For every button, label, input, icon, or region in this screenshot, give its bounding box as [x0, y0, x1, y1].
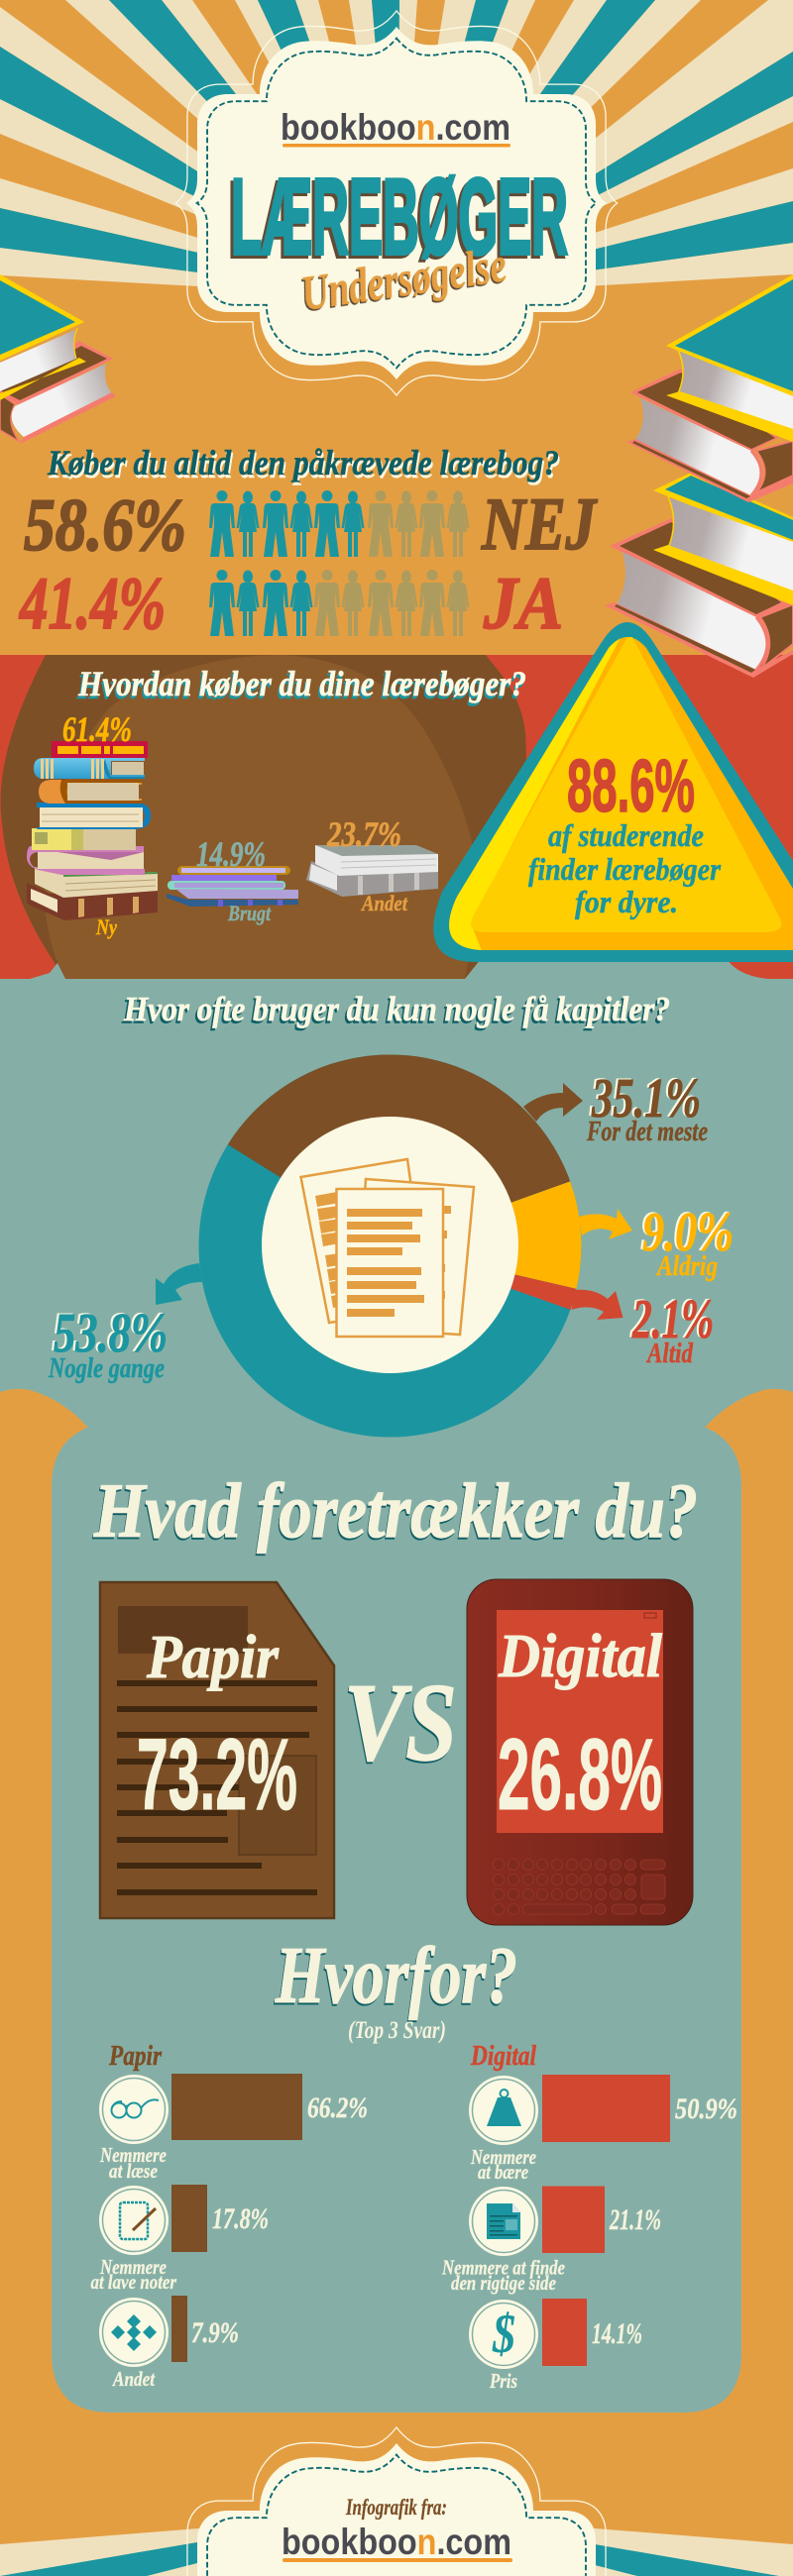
icon: diamonds	[111, 2314, 157, 2351]
heading: preference: Hvad foretrækker du?	[93, 1467, 698, 1554]
question: required textbook: Køber du altid den påkrævede lærebog?	[47, 443, 559, 483]
bar: 66.2%	[171, 2074, 302, 2140]
label: Nemmere	[99, 2143, 167, 2167]
subtitle: Undersøgelse	[297, 236, 510, 321]
brown arch backdrop	[1, 655, 526, 979]
reason: pris	[469, 2299, 642, 2393]
preference panel	[52, 1427, 741, 2413]
label	[470, 2145, 536, 2184]
title badge	[175, 11, 618, 395]
value: 21.1%: 21.1%	[609, 2203, 661, 2236]
heading: why: Hvorfor?	[275, 1930, 517, 2020]
label	[99, 2143, 167, 2183]
footer badge	[187, 2427, 606, 2576]
e-reader	[467, 1579, 693, 1925]
book 4	[605, 518, 793, 678]
reason: nemmere at læse	[99, 2074, 368, 2183]
bar: 17.8%	[171, 2185, 207, 2252]
donut label: 2.1%: 2.1%	[631, 1289, 714, 1350]
label: Nemmere at finde	[441, 2255, 565, 2279]
stat: 41.4% ja	[18, 563, 563, 645]
label: 23.7% andet: 23.7%	[326, 814, 401, 854]
pictogram row: ja	[209, 570, 470, 636]
label: at bære	[478, 2160, 528, 2184]
arrow: for det meste	[523, 1083, 583, 1122]
bar: 21.1%	[542, 2186, 605, 2253]
bar: 50.9%	[542, 2075, 670, 2142]
reason: nemmere at lave noter	[91, 2185, 269, 2294]
donut label: 9.0%: 9.0%	[642, 1202, 734, 1263]
label: Nemmere	[99, 2255, 167, 2279]
versus: VS	[344, 1662, 457, 1784]
donut label: 9.0%: Aldrig	[655, 1251, 718, 1282]
value: 50.9%: 50.9%	[675, 2093, 737, 2125]
arrow: aldrig	[579, 1209, 632, 1239]
subheading: top 3: (Top 3 Svar)	[348, 2017, 446, 2044]
label: at læse	[109, 2159, 158, 2183]
label: Nemmere	[470, 2145, 536, 2169]
pictogram row: nej	[209, 490, 470, 557]
donut label: 9.0%	[642, 1202, 734, 1282]
credit text: Infografik fra:	[345, 2495, 447, 2520]
reason: nemmere at bære	[469, 2075, 737, 2184]
donut label: 35.1%	[586, 1068, 708, 1147]
label: 61.4% ny: Ny	[95, 914, 117, 939]
label: nej: NEJ	[481, 483, 598, 566]
icon: newspaper	[487, 2203, 520, 2239]
label: digital: Digital	[498, 1623, 663, 1690]
donut label: 35.1%: 35.1%	[591, 1068, 701, 1129]
reason: andet	[99, 2296, 239, 2391]
donut label: 2.1%	[631, 1289, 714, 1369]
label: papir: Papir	[146, 1624, 280, 1691]
book stack: brugt	[167, 866, 298, 907]
label: 14.9% brugt: Brugt	[227, 901, 272, 925]
section background: purchase question (red)	[0, 655, 793, 979]
icon: weight	[487, 2090, 521, 2126]
keyboard	[494, 1859, 665, 1914]
value: 17.8%: 17.8%	[212, 2202, 269, 2235]
value: 14.1%: 14.1%	[592, 2317, 642, 2350]
label: 61.4% ny: 61.4%	[62, 709, 132, 749]
label: ja: JA	[483, 563, 563, 645]
book stack: ny	[27, 741, 158, 920]
label: 14.9% brugt	[196, 834, 272, 925]
book 1	[666, 274, 793, 442]
label	[91, 2255, 177, 2294]
book stack: andet	[306, 845, 438, 897]
icon: glasses	[111, 2099, 159, 2118]
donut label: 53.8%	[48, 1303, 168, 1384]
label: Andet	[111, 2367, 156, 2391]
arrow: nogle gange	[156, 1263, 202, 1305]
column heading: papir: Papir	[108, 2040, 163, 2072]
donut label: 53.8%: Nogle gange	[48, 1353, 165, 1384]
question: chapters: Hvor ofte bruger du kun nogle få kapitler?	[123, 990, 670, 1028]
bar: 7.9%	[171, 2296, 187, 2362]
figure: 26.8%: 26.8%	[498, 1718, 662, 1831]
stat: 58.6% nej: 58.6%	[24, 484, 186, 567]
reason: nemmere at finde den rigtige side	[441, 2186, 661, 2295]
label: at lave noter	[91, 2270, 177, 2294]
label: Pris	[489, 2369, 517, 2393]
label: 61.4% ny	[62, 709, 132, 939]
value: 7.9%: 7.9%	[191, 2316, 239, 2349]
logo: bookboon.com: bookboon.com	[281, 107, 510, 148]
arrow: altid	[571, 1290, 623, 1320]
value: 66.2%: 66.2%	[307, 2092, 368, 2124]
icon: note and pen	[120, 2202, 156, 2239]
donut chart	[198, 1054, 581, 1437]
callout triangle	[426, 622, 793, 962]
paper document	[100, 1582, 334, 1918]
icon: documents	[301, 1159, 474, 1337]
bar: 14.1%	[542, 2299, 587, 2366]
books: right decoration	[605, 274, 793, 678]
donut label: 2.1%: Altid	[645, 1339, 694, 1369]
callout text: af studerende	[548, 817, 704, 853]
question: how do you buy: Hvordan køber du dine lærebøger?	[77, 664, 526, 703]
book 3	[653, 473, 793, 605]
donut label: 53.8%: 53.8%	[54, 1303, 168, 1364]
stat: 41.4% ja: 41.4%	[18, 563, 166, 645]
section background: chapters (sage)	[0, 959, 793, 1445]
donut label: 35.1%: For det meste	[586, 1117, 708, 1147]
stat: 58.6% nej	[24, 483, 598, 567]
label: 23.7% andet: Andet	[360, 891, 408, 915]
book 2	[626, 369, 793, 502]
logo: bookboon.com: bookboon.com	[282, 2522, 511, 2562]
label	[441, 2255, 565, 2295]
footer rays	[0, 2513, 793, 2576]
label: 23.7% andet	[326, 814, 408, 915]
callout text: for dyre.	[575, 884, 678, 919]
callout text: finder lærebøger	[528, 851, 721, 887]
label: 14.9% brugt: 14.9%	[196, 834, 266, 874]
label: den rigtige side	[451, 2271, 556, 2295]
books: left decoration	[0, 274, 116, 444]
column heading: digital: Digital	[470, 2040, 537, 2072]
callout figure: 88.6%	[567, 744, 695, 827]
orange lower background with corner bumps	[0, 1389, 793, 2576]
sunburst rays	[0, 0, 793, 297]
callout text	[528, 817, 721, 919]
icon: dollar: $	[492, 2304, 515, 2365]
figure: 73.2%: 73.2%	[137, 1718, 297, 1831]
